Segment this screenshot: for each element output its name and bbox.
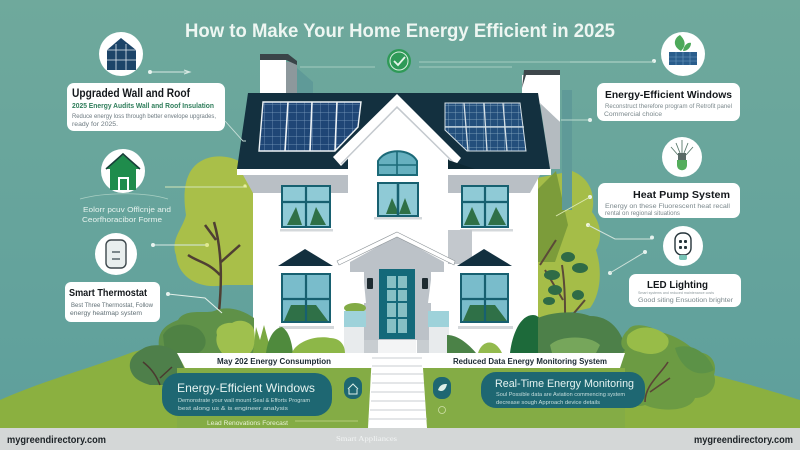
icon: home badge <box>344 377 362 399</box>
panel: real-time energy monitoring: Soul Possible data are Aviation commencing system <box>496 392 625 398</box>
banner: monitoring <box>422 353 625 368</box>
icon: wall and roof <box>99 32 143 76</box>
dormer and window: lower left <box>278 249 334 329</box>
footer strip <box>0 428 800 450</box>
card: upgraded wall and roof: Upgraded Wall and Roof <box>72 86 191 100</box>
panel: energy-efficient windows <box>162 373 332 416</box>
card: upgraded wall and roof: 2025 Energy Audits Wall and Roof Insulation <box>72 103 214 110</box>
connector: thermostat card <box>166 292 222 313</box>
panel: real-time energy monitoring: Real-Time Energy Monitoring <box>495 378 634 390</box>
eave <box>237 169 551 175</box>
title: How to Make Your Home Energy Efficient in 2025 <box>185 21 615 42</box>
connector: heat pump <box>556 195 654 240</box>
card: upgraded wall and roof: ready for 2025. <box>72 122 118 128</box>
card: smart thermostat: Best Three Thermostat, Follow <box>71 303 154 309</box>
connector: thermostat icon <box>151 243 209 247</box>
panel: energy-efficient windows: Demonstrate your wall mount Seal & Efforts Program <box>178 398 310 404</box>
arched window <box>378 151 417 175</box>
eave shadows <box>243 175 540 193</box>
chimney: left <box>260 54 313 94</box>
card: heat pump system: Energy on these Fluorescent heat recall <box>605 204 730 210</box>
connector: energy windows <box>561 59 656 122</box>
card: smart thermostat: Smart Thermostat <box>69 287 147 299</box>
card: heat pump system <box>598 183 740 218</box>
card: smart thermostat <box>65 282 160 322</box>
tree: right <box>537 171 600 352</box>
window: upper left <box>280 186 333 232</box>
roof <box>237 93 550 169</box>
bushes: left <box>130 308 345 385</box>
entry step <box>378 340 416 353</box>
footer caption: Smart Appliances <box>336 435 397 443</box>
panel: real-time energy monitoring: decrease sough Approach device details <box>496 400 601 406</box>
green hill <box>0 345 800 430</box>
connector: wall card to roof <box>225 121 246 141</box>
icon: green home <box>101 149 145 193</box>
lantern: left <box>367 278 373 289</box>
card: energy-efficient windows <box>597 83 740 121</box>
house walls <box>253 175 538 355</box>
check badge <box>387 49 411 73</box>
arrow: green home <box>165 184 247 188</box>
title divider lines <box>300 62 570 67</box>
portico <box>337 230 472 340</box>
icon: thermostat <box>95 233 137 275</box>
card: upgraded wall and roof <box>67 83 225 131</box>
card: upgraded wall and roof: Reduce energy loss through better envelope upgrades, <box>72 114 216 120</box>
card: led lighting: Good siting Ensuotion brighter <box>638 297 734 304</box>
arrow: wall icon <box>148 70 190 74</box>
panel: energy-efficient windows: Energy-Efficient Windows <box>177 381 315 395</box>
window: upper middle <box>374 183 422 220</box>
banner: consumption <box>177 353 372 368</box>
steps <box>368 353 427 428</box>
lantern: right <box>422 278 428 289</box>
icon: led lighting <box>663 226 703 266</box>
icon: leaf badge <box>433 377 451 414</box>
solar panel: left <box>259 102 361 151</box>
card: energy-efficient windows: Reconstruct therefore program of Retrofit panel <box>605 104 732 110</box>
card: heat pump system: rental on regional situations <box>605 211 680 217</box>
panel: energy-efficient windows: best along us & is engineer analysis <box>178 406 288 412</box>
front lawn <box>177 368 625 428</box>
icon: energy windows <box>661 32 705 76</box>
caption: green home <box>80 194 171 224</box>
card: heat pump system: Heat Pump System <box>633 189 730 201</box>
caption: green home: Ceorfhoracibor Forme <box>82 215 162 224</box>
door <box>379 269 415 339</box>
card: energy-efficient windows: Energy-Efficient Windows <box>605 89 732 101</box>
planter: right <box>417 311 449 353</box>
dormer and window: lower right <box>457 249 513 329</box>
connector: led lighting <box>608 250 647 275</box>
banner: consumption: May 202 Energy Consumption <box>217 357 331 366</box>
card: smart thermostat: energy heatmap system <box>70 311 142 317</box>
card: led lighting: LED Lighting <box>647 279 708 291</box>
card: led lighting: Smart systems and reduced maintenance costs <box>638 290 714 295</box>
planter: left <box>344 303 378 353</box>
icon: heat pump <box>662 137 702 177</box>
bushes: right <box>447 312 715 410</box>
window: upper right <box>460 186 513 232</box>
lawn caption: Lead Renovations Forecast <box>207 421 288 427</box>
chimney: right <box>522 70 572 210</box>
tree: left <box>174 156 253 312</box>
card: energy-efficient windows: Commercial choice <box>604 112 663 118</box>
footer url: left: mygreendirectory.com <box>7 434 106 446</box>
banner: monitoring: Reduced Data Energy Monitoring System <box>453 357 607 366</box>
center gable <box>333 94 475 355</box>
panel: real-time energy monitoring <box>481 372 645 408</box>
caption: green home: Eolorr pcuv Offlcnje and <box>83 205 171 214</box>
solar panel: right <box>445 103 526 151</box>
card: led lighting <box>629 274 741 307</box>
